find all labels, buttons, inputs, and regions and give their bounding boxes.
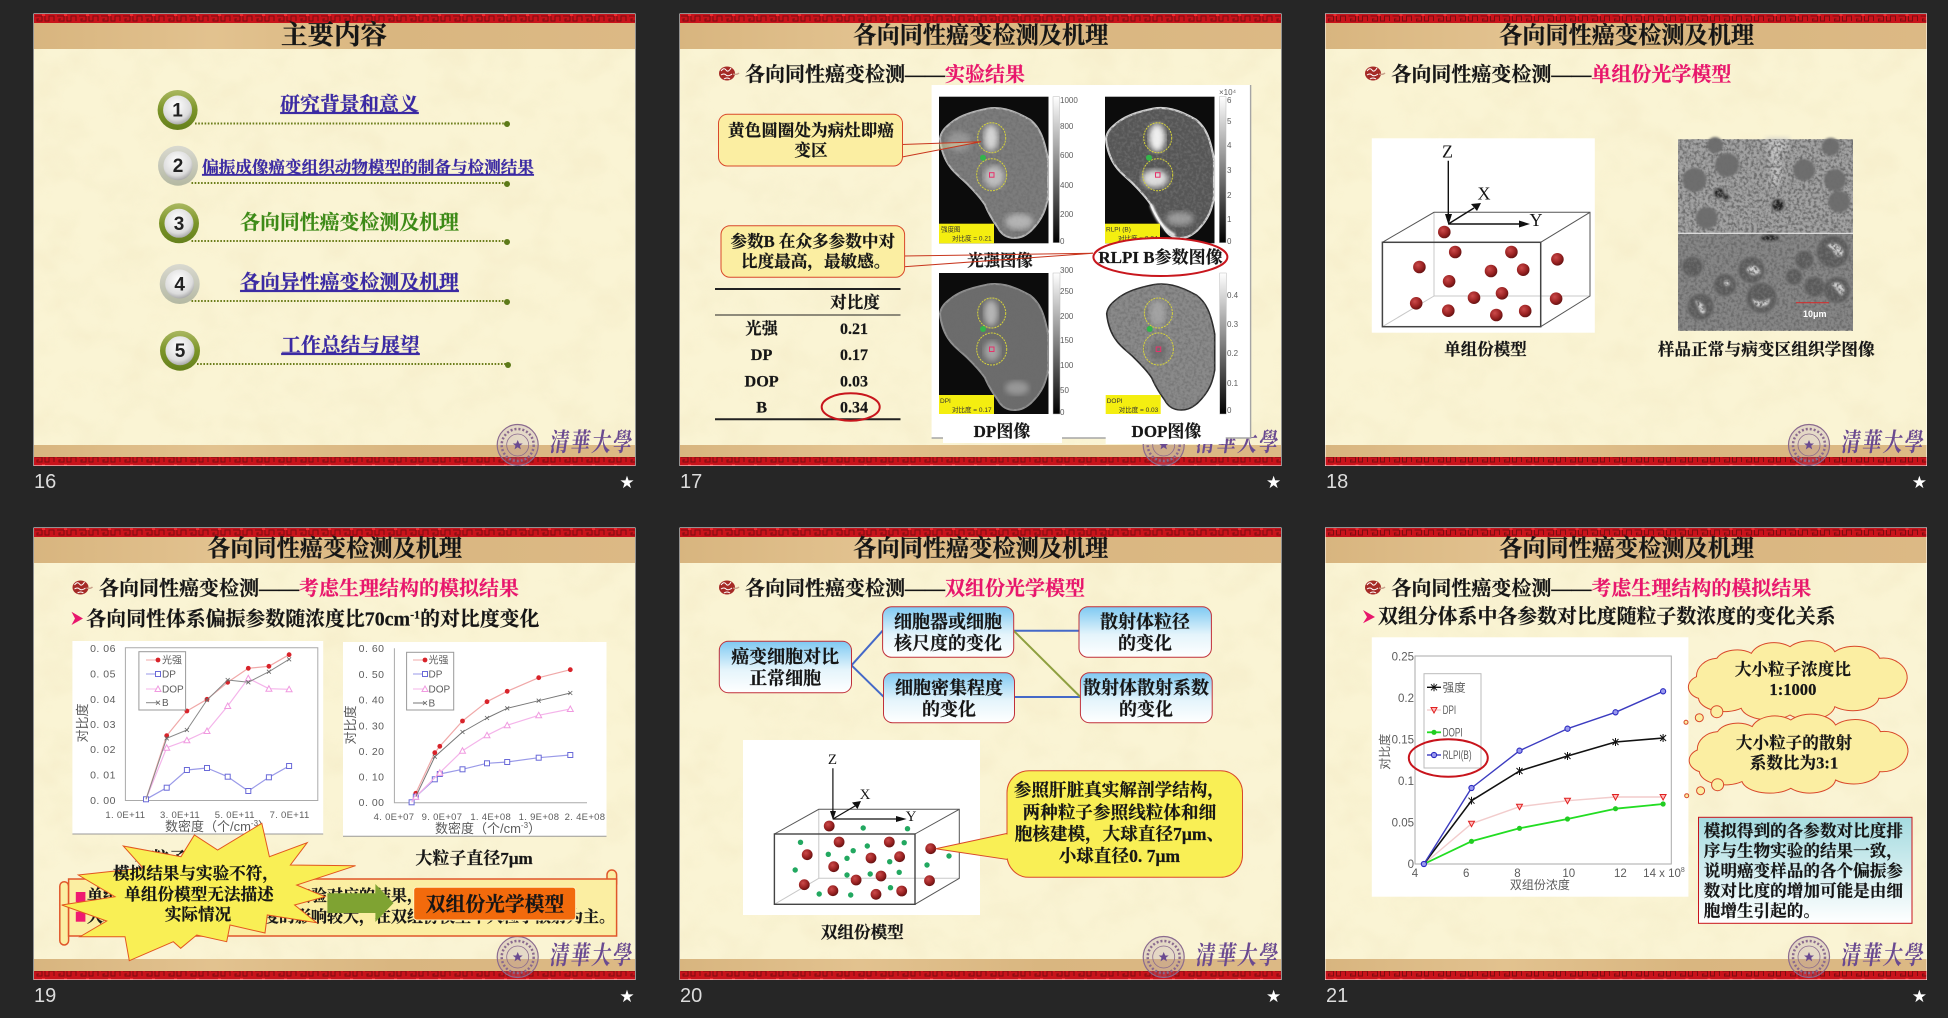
title: 各向同性癌变检测及机理 bbox=[1499, 22, 1754, 49]
line chart: small particle: 光强 bbox=[162, 654, 182, 666]
logo seal bbox=[1788, 424, 1830, 466]
line chart: contrast vs concentration: 0.1 bbox=[1398, 776, 1414, 788]
line chart: small particle: 0. 04 bbox=[90, 694, 116, 706]
colorbar: RLPI B: 3 bbox=[1227, 166, 1232, 175]
slide frame bbox=[680, 528, 1282, 980]
flow box: cancer vs normal cells: 癌变细胞对比 bbox=[731, 646, 839, 667]
title: 各向同性癌变检测及机理 bbox=[1499, 535, 1754, 562]
contrast table: 光强 bbox=[745, 319, 780, 338]
star mark: ★ bbox=[1912, 987, 1927, 1007]
title: 各向同性癌变检测及机理 bbox=[853, 535, 1108, 562]
single component model diagram: Z bbox=[1442, 142, 1453, 162]
histology images bbox=[1678, 137, 1853, 331]
logo seal bbox=[1788, 936, 1830, 978]
line chart: small particle: ） bbox=[258, 819, 271, 834]
slide frame bbox=[1325, 14, 1927, 466]
colorbar: RLPI B: 5 bbox=[1227, 117, 1232, 126]
logo wordmark: 清華大學 bbox=[1840, 941, 1928, 970]
line chart: contrast vs concentration: 8 bbox=[1514, 868, 1521, 880]
line chart: contrast vs concentration: DOPI bbox=[1443, 728, 1463, 740]
panel: slide 21 dual component results bbox=[1325, 528, 1928, 1007]
colorbar: RLPI B: 4 bbox=[1227, 141, 1232, 150]
flow box: organelle size bbox=[883, 607, 1014, 657]
chart captions: 小粒子直径0.7μm bbox=[135, 849, 265, 868]
logo wordmark: 清華大學 bbox=[1194, 941, 1282, 970]
callout: model parameters: 胞核建模，大球直径7μm、 bbox=[1015, 824, 1224, 845]
flow box: scattering coefficient: 散射体散射系数 bbox=[1083, 677, 1209, 698]
conclusion scroll bbox=[60, 870, 617, 945]
contrast table: 0.21 bbox=[840, 321, 868, 338]
histology images: 10μm bbox=[1803, 309, 1827, 319]
subtitle: 各向同性癌变检测——实验结果 bbox=[745, 62, 1025, 86]
panel: slide 17 experimental results bbox=[680, 14, 1282, 493]
menu item 1 bbox=[158, 90, 510, 130]
line chart: small particle: 0. 06 bbox=[90, 643, 116, 655]
line chart: small particle: 0. 03 bbox=[90, 719, 116, 731]
single component model diagram: X bbox=[1478, 184, 1490, 204]
orange result box: 双组份光学模型 bbox=[426, 894, 564, 916]
colorbar: RLPI B: ×10⁴ bbox=[1219, 88, 1237, 97]
callout: yellow circles mark lesion: 黄色圆圈处为病灶即癌 bbox=[728, 120, 894, 140]
subtitle: 各向同性癌变检测——考虑生理结构的模拟结果 bbox=[1391, 576, 1811, 600]
thought cloud: scattering ratio: 系数比为3:1 bbox=[1750, 752, 1838, 772]
contrast table: 0.17 bbox=[840, 347, 868, 364]
thought cloud: scattering ratio: 大小粒子的散射 bbox=[1736, 732, 1852, 752]
line chart: contrast vs concentration bbox=[1372, 637, 1688, 897]
callout: yellow circles mark lesion: 变区 bbox=[794, 141, 828, 160]
line chart: small particle: DOP bbox=[162, 684, 184, 696]
line chart: large particle: 0. 00 bbox=[359, 797, 385, 809]
line chart: small particle: 1. 0E+11 bbox=[105, 810, 145, 821]
callout: parameter B most sensitive: 参数B 在众多参数中对 bbox=[730, 231, 895, 251]
line chart: large particle: 光强 bbox=[428, 654, 448, 666]
menu item 4: 各向异性癌变检测及机理 bbox=[240, 270, 459, 294]
colorbar: DP: 0 bbox=[1060, 408, 1065, 417]
image: RLPI B map: RLPI (B) bbox=[1106, 227, 1131, 234]
line chart: contrast vs concentration: 强度 bbox=[1443, 680, 1466, 694]
colorbar: DP: 300 bbox=[1060, 266, 1074, 275]
colorbar: intensity: 400 bbox=[1060, 181, 1074, 190]
flow box: organelle size: 细胞器或细胞 bbox=[894, 612, 1002, 632]
menu item 1: 研究背景和意义 bbox=[280, 93, 419, 116]
line chart: large particle: DP bbox=[428, 670, 443, 680]
line chart: large particle: 1. 4E+08 bbox=[470, 812, 511, 823]
thought cloud: concentration ratio: 1:1000 bbox=[1769, 680, 1816, 699]
star mark: ★ bbox=[1266, 987, 1281, 1007]
line chart: large particle: ） bbox=[528, 821, 541, 836]
colorbar: RLPI B: 0 bbox=[1227, 237, 1232, 246]
line chart: large particle: 0. 30 bbox=[359, 720, 385, 732]
line chart: large particle: 0. 20 bbox=[359, 746, 385, 758]
line chart: contrast vs concentration: 12 bbox=[1614, 868, 1627, 880]
star mark: ★ bbox=[1266, 473, 1281, 493]
line chart: small particle: 0. 00 bbox=[90, 795, 116, 807]
line chart: small particle: 数密度（个/cm bbox=[165, 819, 251, 834]
star mark: ★ bbox=[619, 987, 635, 1007]
subheading with marker: 的对比度变化 bbox=[420, 606, 540, 630]
RLPI B label with ring bbox=[1093, 238, 1227, 276]
thought cloud: concentration ratio: 大小粒子浓度比 bbox=[1735, 660, 1851, 679]
image captions: 光强图像 bbox=[967, 251, 1033, 270]
image: DP map bbox=[939, 273, 1048, 415]
contrast table: DP bbox=[751, 346, 773, 364]
logo wordmark: 清華大學 bbox=[1194, 428, 1282, 457]
colorbar: intensity: 200 bbox=[1060, 210, 1074, 219]
logo wordmark: 清華大學 bbox=[548, 428, 636, 457]
flow box: cell density bbox=[884, 673, 1014, 723]
line chart: contrast vs concentration: 10 bbox=[1562, 868, 1575, 880]
line chart: small particle: 0. 01 bbox=[90, 770, 116, 782]
line chart: large particle: -3 bbox=[521, 821, 529, 830]
line chart: large particle: 数密度（个/cm bbox=[435, 821, 521, 836]
conclusion scroll: 大粒子对偏振参数的对比度的影响较大，在双组份模型中大粒子散射为主。 bbox=[87, 907, 615, 927]
image captions bbox=[967, 251, 1201, 441]
image: DP map: DPI bbox=[940, 398, 951, 405]
subheading with marker: -1 bbox=[410, 608, 420, 622]
menu item 5 bbox=[160, 331, 511, 371]
colorbar: intensity: 600 bbox=[1060, 151, 1074, 160]
RLPI B label with ring: RLPI B参数图像 bbox=[1098, 247, 1223, 267]
line chart: small particle bbox=[72, 641, 323, 834]
colorbar: DOP: 0.1 bbox=[1227, 379, 1239, 388]
line chart: large particle: 0. 50 bbox=[359, 669, 385, 681]
thought cloud: concentration ratio bbox=[1684, 641, 1907, 724]
star mark: ★ bbox=[1912, 473, 1927, 493]
bullet icon bbox=[1365, 580, 1385, 594]
logo wordmark: 清華大學 bbox=[548, 941, 636, 970]
single component model diagram bbox=[1372, 138, 1595, 333]
flow box: scatterer size bbox=[1079, 607, 1211, 657]
line chart: contrast vs concentration: 8 bbox=[1681, 867, 1685, 874]
logo wordmark: 清華大學 bbox=[1840, 428, 1928, 457]
colorbar: DP: 50 bbox=[1060, 386, 1069, 395]
line chart: small particle: B bbox=[162, 698, 169, 709]
line chart: small particle: DP bbox=[162, 670, 176, 680]
menu item 2: 偏振成像癌变组织动物模型的制备与检测结果 bbox=[202, 157, 534, 177]
colorbar: RLPI B: 2 bbox=[1227, 191, 1232, 200]
image: intensity map bbox=[939, 97, 1048, 243]
callout: model parameters bbox=[936, 771, 1242, 877]
line chart: large particle: 0. 10 bbox=[359, 772, 385, 784]
callout starburst: 实际情况 bbox=[165, 904, 232, 924]
image: intensity map: 对比度 = 0.21 bbox=[952, 234, 992, 243]
line chart: large particle: 4. 0E+07 bbox=[374, 812, 414, 823]
line chart: large particle: 对比度 bbox=[343, 705, 358, 745]
line chart: contrast vs concentration: DPI bbox=[1443, 705, 1456, 717]
line chart: contrast vs concentration: 0.05 bbox=[1392, 818, 1414, 830]
line chart: large particle: 2. 4E+08 bbox=[565, 812, 605, 823]
captions: 样品正常与病变区组织学图像 bbox=[1658, 339, 1875, 359]
flow box: scatterer size: 的变化 bbox=[1118, 632, 1172, 654]
menu item 4: 4 bbox=[174, 274, 185, 296]
callout: parameter B most sensitive bbox=[721, 226, 1093, 277]
colorbar: DP: 100 bbox=[1060, 361, 1074, 370]
line chart: contrast vs concentration: 6 bbox=[1463, 868, 1469, 880]
line chart: small particle: 5. 0E+11 bbox=[215, 810, 255, 821]
menu item 3 bbox=[159, 203, 510, 245]
subheading with marker: 各向同性体系偏振参数随浓度比70cm bbox=[86, 608, 410, 630]
bullet icon bbox=[719, 580, 739, 594]
image panel bbox=[932, 85, 1251, 444]
colorbar: DOP: 0 bbox=[1227, 406, 1232, 415]
line chart: contrast vs concentration: 14 x 10 bbox=[1643, 867, 1685, 880]
flow box: organelle size: 核尺度的变化 bbox=[894, 632, 1002, 654]
line chart: contrast vs concentration: 0.25 bbox=[1392, 652, 1414, 664]
conclusion note: 说明癌变样品的各个偏振参 bbox=[1704, 860, 1903, 880]
colorbar: DP: 250 bbox=[1060, 287, 1074, 296]
colorbar: intensity: 1000 bbox=[1060, 96, 1078, 105]
contrast table: DOP bbox=[745, 372, 779, 390]
line chart: small particle: 对比度 bbox=[75, 703, 90, 743]
captions bbox=[1444, 339, 1875, 359]
callout starburst bbox=[62, 823, 356, 961]
image: DOP map bbox=[1106, 273, 1215, 415]
panel: slide 20 dual component model bbox=[680, 528, 1282, 1007]
colorbar: intensity: 0 bbox=[1060, 237, 1065, 246]
flow connectors bbox=[852, 631, 1080, 697]
contrast table: 0.34 bbox=[840, 400, 868, 416]
line chart: small particle: 3. 0E+11 bbox=[160, 810, 200, 821]
bullet icon bbox=[719, 66, 739, 80]
dual component model diagram: Y bbox=[906, 809, 917, 825]
panel: slide 19 simulation results bbox=[34, 528, 636, 1007]
subheading with marker: 双组分体系中各参数对比度随粒子数浓度的变化关系 bbox=[1378, 604, 1837, 628]
line chart: large particle: 0. 40 bbox=[359, 694, 385, 706]
line chart: large particle bbox=[343, 642, 606, 836]
callout starburst: 单组份模型无法描述 bbox=[124, 884, 275, 904]
menu item 2: 2 bbox=[173, 156, 183, 177]
slide frame bbox=[34, 14, 636, 466]
line chart: large particle: 0. 60 bbox=[359, 643, 385, 655]
menu item 4 bbox=[160, 264, 510, 305]
image captions: DP图像 bbox=[974, 422, 1030, 441]
contrast table bbox=[715, 289, 900, 421]
flow box: scattering coefficient bbox=[1080, 673, 1212, 723]
colorbar: DP: 150 bbox=[1060, 336, 1074, 345]
bullet icon bbox=[1365, 66, 1385, 80]
colorbar: DOP: 0.4 bbox=[1227, 291, 1239, 300]
callout starburst: 模拟结果与实验不符， bbox=[113, 863, 279, 884]
chart captions: 大粒子直径7μm bbox=[415, 849, 533, 868]
slide number: 17 bbox=[680, 471, 702, 493]
slide number: 18 bbox=[1326, 471, 1348, 493]
menu item 3: 各向同性癌变检测及机理 bbox=[240, 210, 459, 234]
line chart: contrast vs concentration: 0.2 bbox=[1398, 693, 1414, 705]
menu item 5: 5 bbox=[175, 341, 186, 362]
logo seal bbox=[1143, 424, 1184, 466]
callout: parameter B most sensitive: 比度最高，最敏感。 bbox=[741, 251, 890, 272]
line chart: contrast vs concentration: 对比度 bbox=[1377, 734, 1392, 770]
menu item 3: 3 bbox=[174, 214, 184, 235]
title: 主要内容 bbox=[281, 20, 387, 50]
line chart: contrast vs concentration: 4 bbox=[1412, 868, 1419, 880]
callout: yellow circles mark lesion bbox=[718, 114, 981, 166]
menu item 2 bbox=[158, 146, 534, 187]
image: RLPI B map bbox=[1105, 97, 1214, 243]
flow box: cancer vs normal cells: 正常细胞 bbox=[749, 668, 821, 688]
line chart: small particle: -3 bbox=[251, 819, 259, 828]
colorbar: intensity: 800 bbox=[1060, 122, 1074, 131]
bullet icon bbox=[72, 580, 92, 594]
flow box: scattering coefficient: 的变化 bbox=[1119, 698, 1173, 720]
line chart: large particle: 1. 9E+08 bbox=[519, 812, 559, 823]
star mark: ★ bbox=[619, 473, 635, 493]
callout: model parameters: 两种粒子参照线粒体和细 bbox=[1023, 802, 1217, 822]
colorbar: intensity bbox=[1053, 96, 1078, 246]
arrow bbox=[327, 884, 394, 922]
image: DOP map: DOPI bbox=[1107, 398, 1123, 405]
slide frame bbox=[680, 14, 1282, 466]
orange result box bbox=[414, 887, 576, 920]
image: DP map: 对比度 = 0.17 bbox=[952, 405, 992, 414]
conclusion note: 模拟得到的各参数对比度排 bbox=[1704, 820, 1903, 840]
flow box: cell density: 的变化 bbox=[922, 698, 976, 720]
flow box: cell density: 细胞密集程度 bbox=[895, 677, 1003, 698]
colorbar: RLPI B: 1 bbox=[1227, 215, 1232, 224]
conclusion note: 胞增生引起的。 bbox=[1704, 900, 1820, 920]
slide number: 21 bbox=[1326, 985, 1348, 1007]
conclusion scroll: 单组份模型不能解释各向同性实验对应的结果， bbox=[87, 886, 423, 906]
caption: 双组份模型 bbox=[821, 923, 904, 942]
line chart: contrast vs concentration: 0.15 bbox=[1392, 734, 1414, 746]
line chart: contrast vs concentration: RLPI(B) bbox=[1443, 750, 1472, 762]
subtitle: 各向同性癌变检测——单组份光学模型 bbox=[1391, 62, 1731, 86]
panel: slide 16 contents bbox=[34, 14, 636, 493]
panel: slide 18 single component model bbox=[1325, 14, 1928, 493]
image: DOP map: 对比度 = 0.03 bbox=[1119, 405, 1159, 414]
line chart: contrast vs concentration: 双组份浓度 bbox=[1510, 877, 1570, 892]
conclusion note: 数对比度的增加可能是由细 bbox=[1704, 880, 1903, 900]
colorbar: DOP: 0.3 bbox=[1227, 320, 1239, 329]
colorbar: RLPI B: 6 bbox=[1227, 96, 1232, 105]
line chart: large particle: B bbox=[428, 698, 436, 710]
slide frame bbox=[34, 528, 636, 980]
line chart: large particle: DOP bbox=[428, 684, 450, 696]
line chart: small particle: 0. 05 bbox=[90, 668, 116, 680]
conclusion note: 序与生物实验的结果一致， bbox=[1704, 842, 1903, 862]
thought cloud: scattering ratio bbox=[1685, 714, 1908, 798]
image: intensity map: 强度图 bbox=[941, 225, 960, 234]
callout: model parameters: 小球直径0. 7μm bbox=[1059, 846, 1180, 866]
conclusion note bbox=[1698, 817, 1912, 923]
dual component model diagram bbox=[743, 740, 980, 915]
subtitle: 各向同性癌变检测——考虑生理结构的模拟结果 bbox=[99, 576, 519, 600]
dual component model diagram: Z bbox=[828, 752, 837, 768]
colorbar: RLPI B bbox=[1219, 88, 1237, 246]
colorbar: DP bbox=[1053, 266, 1074, 417]
callout: model parameters: 参照肝脏真实解剖学结构， bbox=[1014, 780, 1225, 801]
captions: 单组份模型 bbox=[1444, 340, 1527, 359]
line chart: small particle: 0. 02 bbox=[90, 744, 116, 756]
chart captions bbox=[135, 849, 533, 868]
subtitle: 各向同性癌变检测——双组份光学模型 bbox=[745, 576, 1085, 600]
logo seal bbox=[497, 936, 538, 978]
slide number: 20 bbox=[680, 985, 702, 1007]
slide number: 19 bbox=[34, 985, 56, 1007]
single component model diagram: Y bbox=[1530, 210, 1542, 230]
image: RLPI B map: 对比度 = 0.34 bbox=[1118, 234, 1158, 243]
image captions: DOP图像 bbox=[1132, 422, 1201, 441]
contrast table: B bbox=[756, 398, 767, 416]
line chart: small particle: 7. 0E+11 bbox=[270, 810, 310, 821]
logo seal bbox=[497, 424, 538, 466]
colorbar: DOP: 0.2 bbox=[1227, 349, 1239, 358]
dual component model diagram: X bbox=[860, 787, 871, 803]
menu item 1: 1 bbox=[172, 100, 183, 122]
colorbar: DOP bbox=[1220, 273, 1239, 415]
flow box: cancer vs normal cells bbox=[719, 641, 852, 693]
line chart: large particle: 9. 0E+07 bbox=[422, 812, 462, 823]
contrast table: 对比度 bbox=[830, 293, 880, 312]
subheading with marker bbox=[72, 606, 540, 630]
menu item 5: 工作总结与展望 bbox=[281, 334, 420, 357]
flow box: scatterer size: 散射体粒径 bbox=[1100, 611, 1191, 632]
slide frame bbox=[1325, 528, 1927, 980]
line chart: contrast vs concentration: 0 bbox=[1408, 859, 1414, 871]
colorbar: DP: 200 bbox=[1060, 312, 1074, 321]
title: 各向同性癌变检测及机理 bbox=[207, 535, 462, 562]
contrast table: 0.03 bbox=[840, 374, 868, 390]
slide number: 16 bbox=[34, 471, 56, 493]
logo seal bbox=[1143, 936, 1184, 978]
title: 各向同性癌变检测及机理 bbox=[853, 22, 1108, 49]
